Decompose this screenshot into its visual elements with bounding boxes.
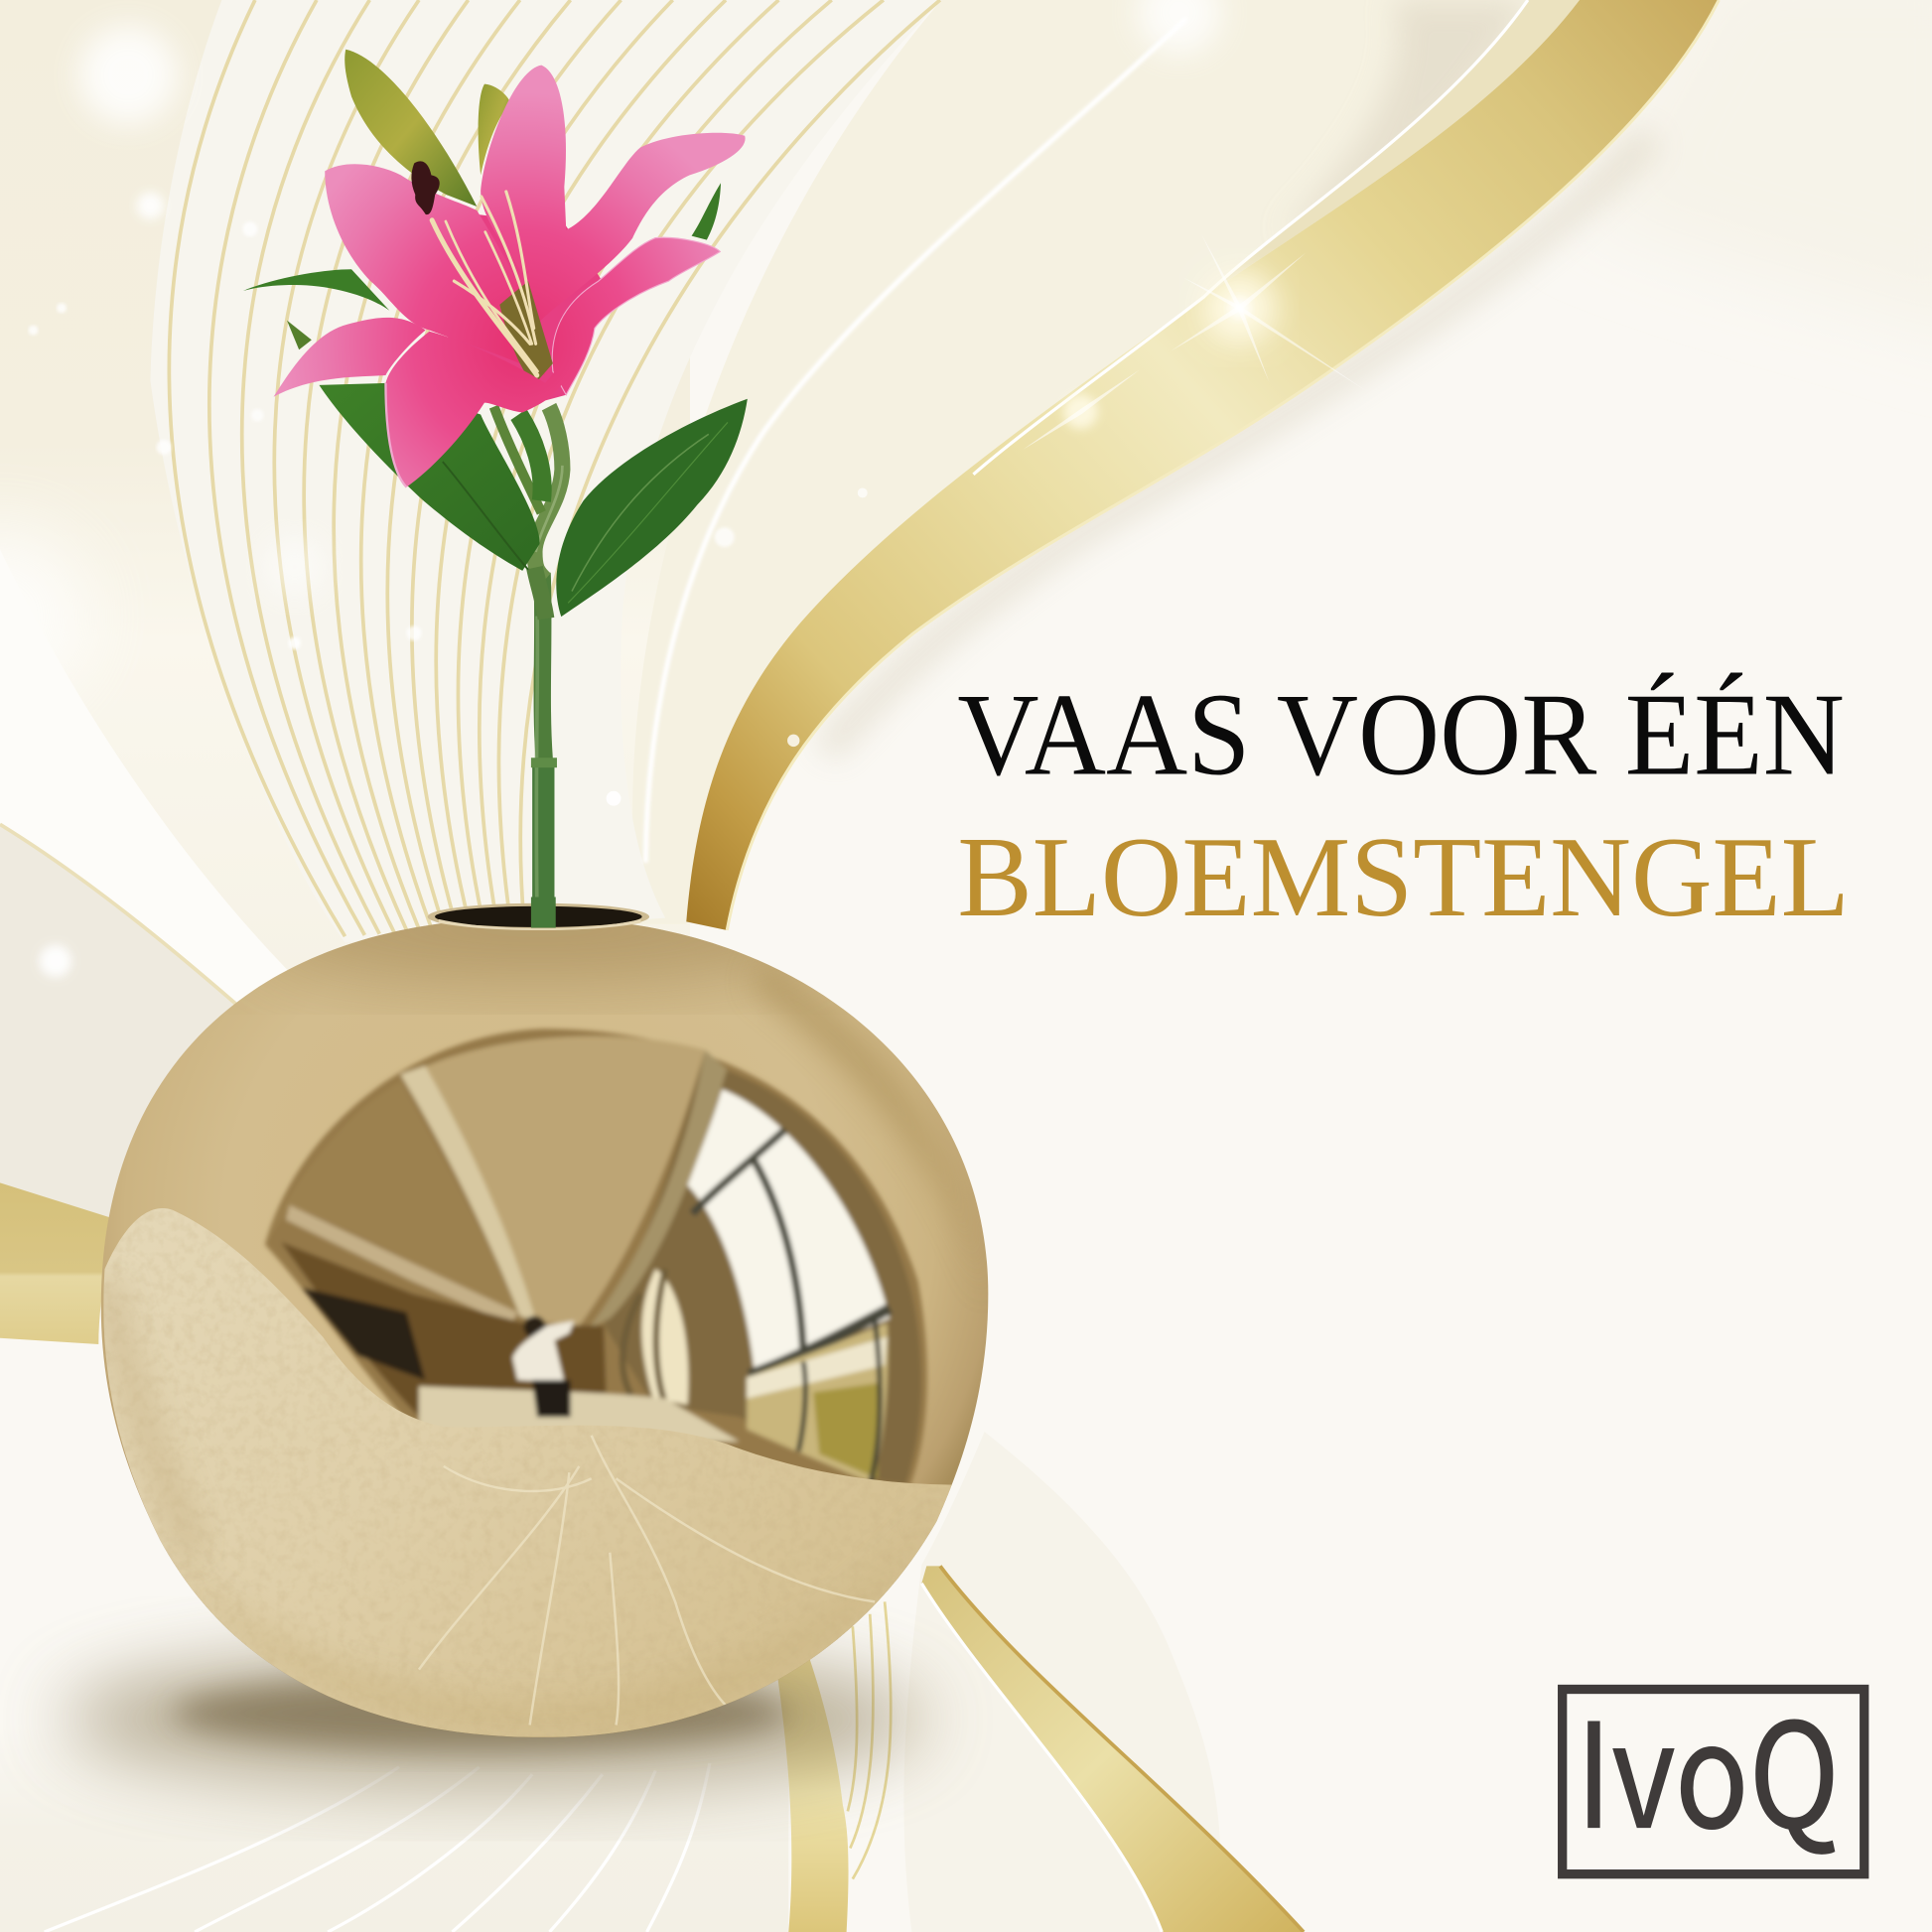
bottom fade with rays (0, 1725, 788, 1932)
lower left leaf tip (287, 321, 312, 349)
petal top (481, 66, 566, 273)
soft white light curve (645, 19, 1186, 863)
left white band (0, 550, 288, 1007)
main gold ribbon (686, 0, 1719, 930)
ceiling beam (400, 1066, 536, 1320)
flower stems (494, 407, 562, 619)
ribbon highlight edges (973, 0, 1528, 475)
ribbon drop shadow (826, 136, 1651, 752)
right leaf (556, 399, 748, 617)
ribbon light wedge (1204, 0, 1580, 297)
vase body (101, 918, 988, 1737)
vase (86, 884, 988, 1749)
thin left gold edge (0, 824, 239, 1007)
vase shadow (62, 1651, 924, 1787)
brand name: IvoQ (1576, 1661, 1840, 1869)
flower throat (499, 281, 553, 385)
mirrored room (265, 1029, 927, 1491)
left grey field (0, 824, 321, 1232)
petal left large (325, 164, 545, 375)
line fan panel (150, 0, 941, 942)
sparkles (29, 0, 1368, 977)
side windows (641, 1269, 688, 1405)
left gold ribbon (0, 1182, 113, 1344)
ribbon top shade (1282, 0, 1528, 234)
window mullions (692, 1130, 890, 1375)
bottom centre gold ribbon (773, 1651, 849, 1932)
top right tint (1578, 0, 1932, 345)
second flare (1023, 369, 1140, 450)
petal upper right (528, 133, 746, 329)
bud large (345, 50, 477, 207)
large arched window (688, 1089, 890, 1370)
anther (411, 161, 440, 214)
ceiling centre (419, 1036, 705, 1325)
upper metallic shading (282, 923, 784, 1008)
sand coloured lower reflection (86, 1195, 986, 1749)
title line one: VAAS VOOR ÉÉN (957, 668, 1845, 799)
petal backing (447, 214, 603, 407)
brand logo (1563, 1661, 1864, 1874)
centre stalk behind the bloom (518, 415, 542, 501)
petal lower left (274, 318, 426, 397)
vase opening (428, 903, 649, 930)
bottom right gold ribbon (921, 1566, 1304, 1932)
small right leaf tip (692, 183, 721, 240)
flower stem (531, 573, 557, 926)
wall ring on the right (604, 1062, 921, 1484)
lily flower (243, 50, 748, 619)
large left glow (0, 530, 86, 702)
petal lower right (552, 237, 720, 395)
decorative gold line fan (169, 0, 940, 936)
room base (265, 1029, 927, 1491)
reflected person (512, 1315, 574, 1417)
stamens (432, 192, 538, 375)
bottom line fan (848, 1601, 891, 1879)
bud small (479, 84, 510, 175)
cream panel right of the fan (632, 0, 1540, 924)
narrow left leaf (243, 269, 389, 311)
lower cream swoosh (903, 1432, 1223, 1932)
dark back room (281, 1242, 607, 1430)
petal front (385, 332, 565, 487)
title (957, 668, 1850, 940)
large lower left leaf (319, 383, 540, 571)
floor (419, 1386, 740, 1442)
star flare (1171, 234, 1368, 392)
left ceiling (265, 1082, 517, 1312)
left cream field (0, 0, 690, 986)
outside view (747, 1323, 888, 1483)
title line two: BLOEMSTENGEL (957, 813, 1850, 940)
stem inside the opening (531, 897, 556, 928)
